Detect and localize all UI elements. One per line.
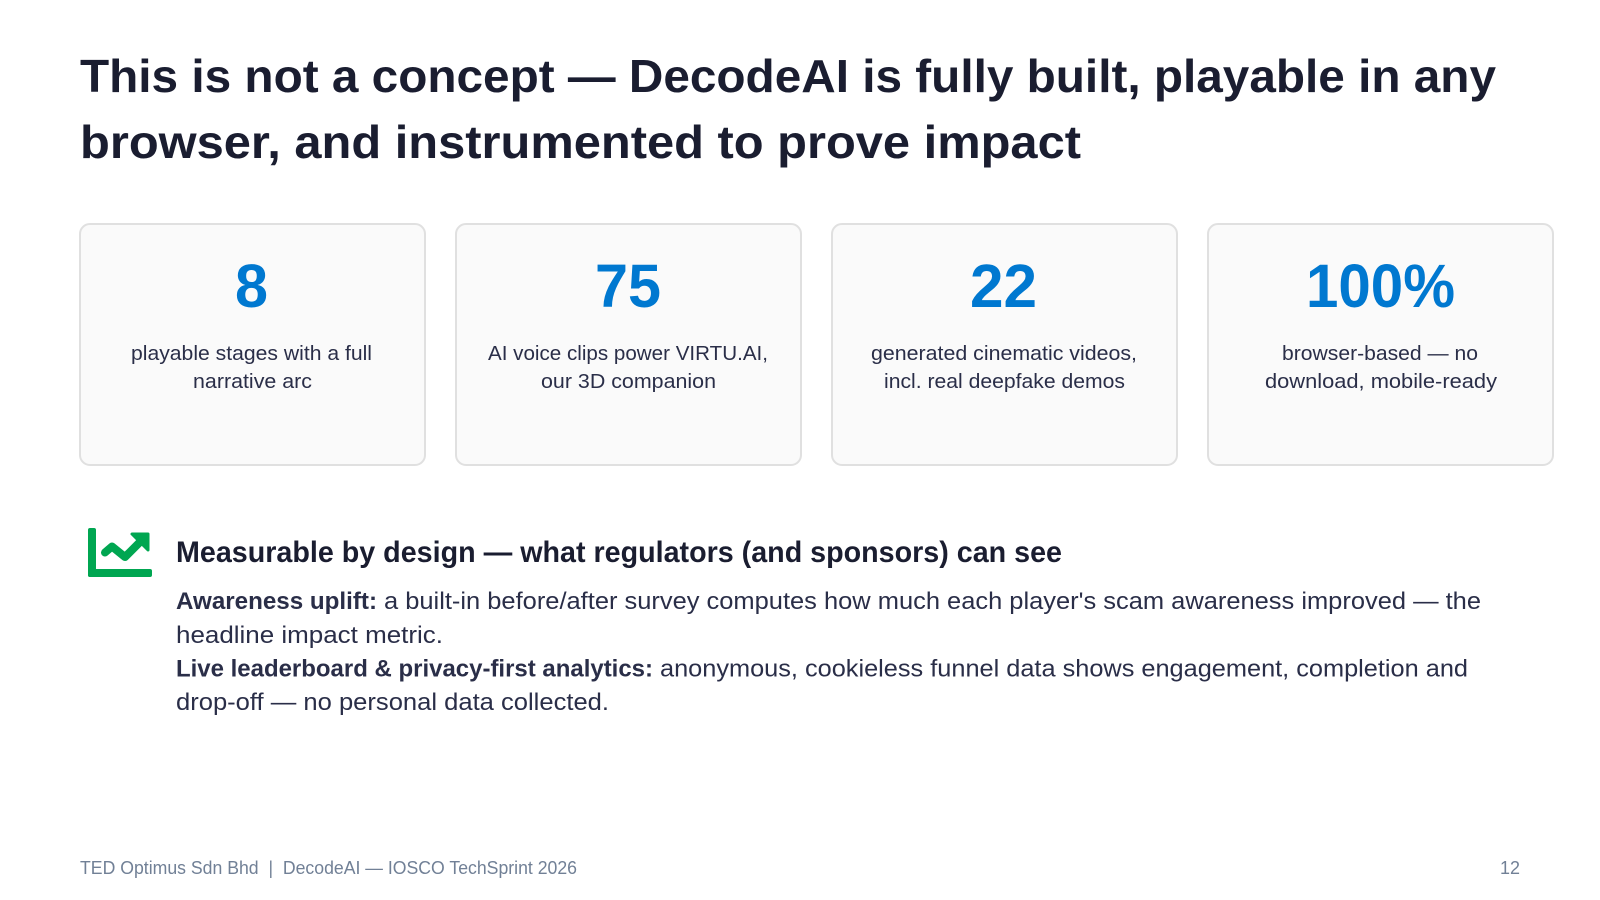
stat number: 75: 75 xyxy=(595,252,661,320)
text block: measurable details: headline impact metric. xyxy=(176,622,443,649)
stat description: voice clips: our 3D companion xyxy=(541,370,716,393)
page number: 12 xyxy=(1500,858,1520,878)
stat number: 22: 22 xyxy=(970,252,1037,320)
stat number: 100%: 100% xyxy=(1306,252,1455,320)
panel: stat 8 stages xyxy=(80,224,425,465)
stat description: voice clips: AI voice clips power VIRTU.AI, xyxy=(488,342,768,365)
panel: stat 100% browser-based xyxy=(1208,224,1553,465)
stat description: stages xyxy=(131,342,372,393)
stat description: videos: incl. real deepfake demos xyxy=(884,370,1125,393)
icon: green rising chart xyxy=(88,528,152,577)
stat number: 8: 8 xyxy=(235,252,268,320)
title: This is not a concept — DecodeAI is fully built, playable in any xyxy=(80,50,1496,102)
heading: measurable by design: Measurable by design — what regulators (and sponsors) can see xyxy=(176,536,1062,569)
text block: measurable details xyxy=(176,588,1481,716)
stat description: videos xyxy=(871,342,1137,393)
text block: measurable details: Awareness uplift: xyxy=(176,588,377,615)
stat description: browser-based: browser-based — no xyxy=(1282,342,1478,365)
stat description: browser-based xyxy=(1265,342,1498,393)
stat description: stages: narrative arc xyxy=(193,370,312,393)
stat description: voice clips xyxy=(488,342,768,393)
stat description: browser-based: download, mobile-ready xyxy=(1265,370,1498,393)
text block: measurable details: a built-in before/after survey computes how much each player's scam awareness improved — the xyxy=(384,588,1481,615)
text block: measurable details: Live leaderboard & privacy-first analytics: xyxy=(176,656,653,682)
stat description: stages: playable stages with a full xyxy=(131,342,372,365)
panel: stat 22 videos xyxy=(832,224,1177,465)
title: browser, and instrumented to prove impact xyxy=(80,116,1081,168)
panel: stat 75 voice clips xyxy=(456,224,801,465)
title xyxy=(80,50,1496,168)
text block: measurable details: drop-off — no personal data collected. xyxy=(176,689,609,716)
footer: TED Optimus Sdn Bhd | DecodeAI — IOSCO TechSprint 2026 xyxy=(80,858,577,878)
stat description: videos: generated cinematic videos, xyxy=(871,342,1137,365)
text block: measurable details: anonymous, cookieless funnel data shows engagement, completion and xyxy=(660,656,1468,682)
